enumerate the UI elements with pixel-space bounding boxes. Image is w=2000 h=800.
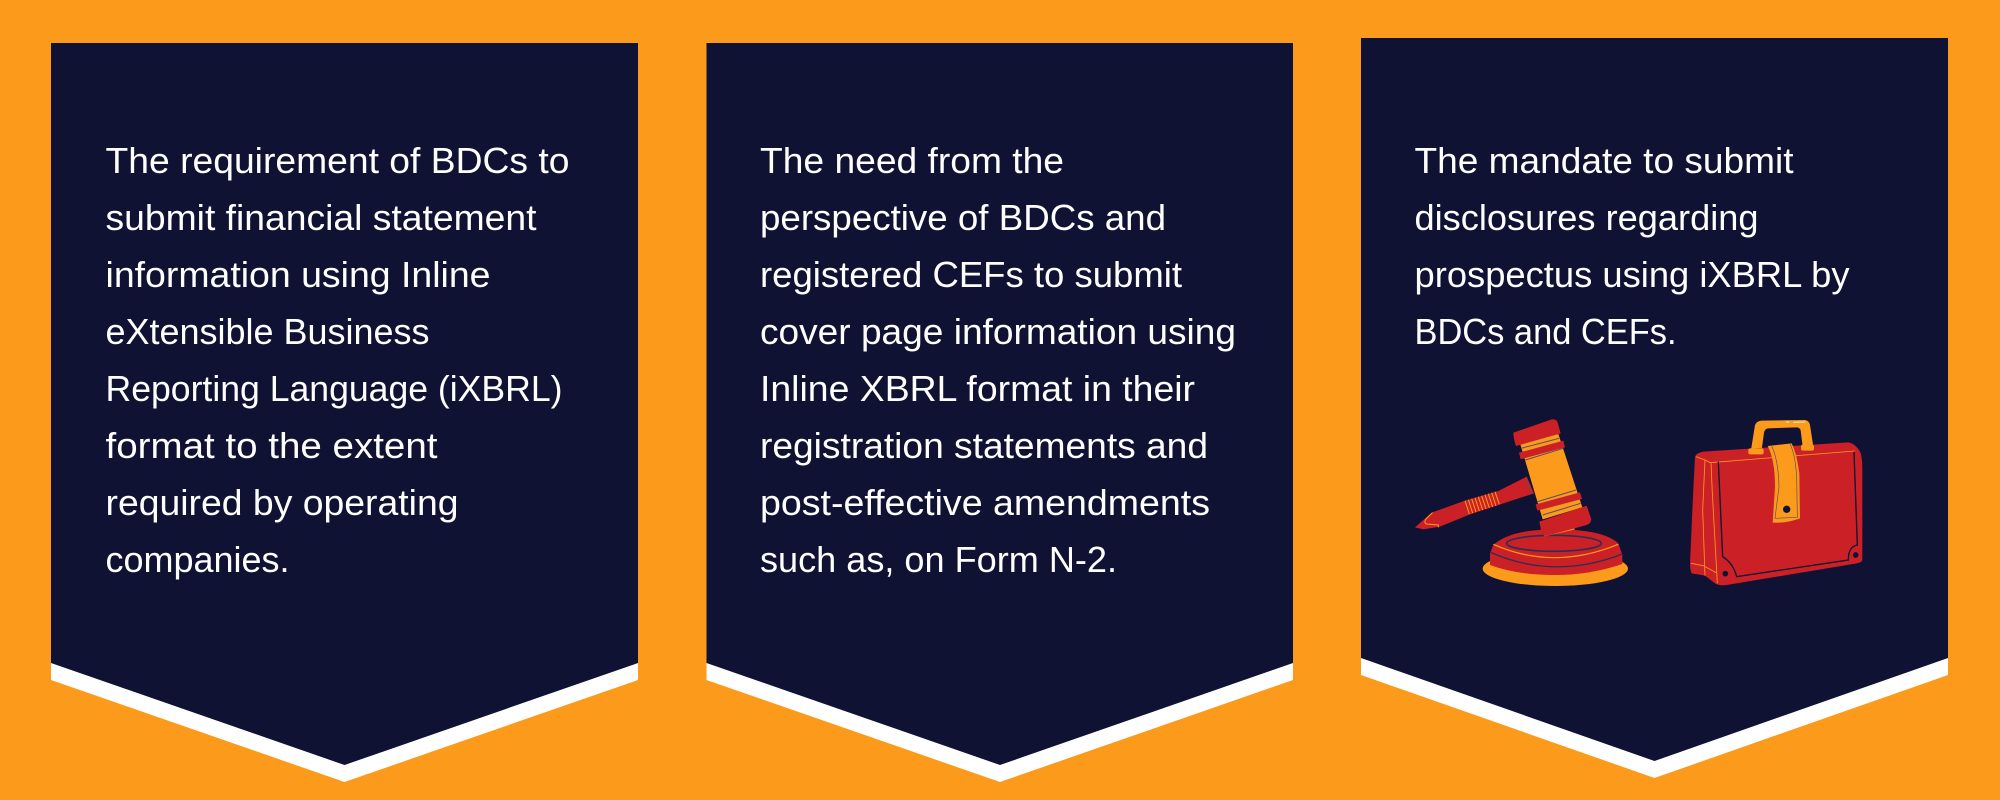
panel: cover page information	[706, 43, 1293, 782]
text block: panel 1: Reporting Language (iXBRL)	[106, 368, 562, 409]
text block: panel 2: registered CEFs to submit	[760, 254, 1182, 295]
panel: prospectus disclosures	[1361, 38, 1948, 778]
text block: panel 3	[1414, 140, 1850, 352]
panel: financial statement requirement	[51, 43, 638, 782]
banner body	[706, 43, 1293, 765]
text block: panel 2: perspective of BDCs and	[760, 197, 1166, 238]
text block: panel 1: required by operating	[106, 482, 458, 523]
text block: panel 3: The mandate to submit	[1414, 140, 1794, 181]
text block: panel 2: registration statements and	[760, 425, 1208, 466]
banner shadow	[1361, 658, 1948, 778]
text block: panel 1: format to the extent	[106, 425, 438, 466]
banner body	[51, 43, 638, 765]
text block: panel 1	[106, 140, 570, 580]
text block: panel 1: The requirement of BDCs to	[106, 140, 570, 181]
text block: panel 2	[760, 140, 1236, 580]
text block: panel 1: information using Inline	[106, 254, 490, 295]
text block: panel 1: companies.	[106, 539, 290, 580]
text block: panel 2: Inline XBRL format in their	[760, 368, 1195, 409]
banner body	[1361, 38, 1948, 761]
text block: panel 3: prospectus using iXBRL by	[1414, 254, 1850, 295]
banner shadow	[706, 663, 1293, 782]
text block: panel 1: eXtensible Business	[106, 311, 430, 352]
text block: panel 2: cover page information using	[760, 311, 1236, 352]
text block: panel 2: such as, on Form N-2.	[760, 539, 1117, 580]
text block: panel 3: BDCs and CEFs.	[1414, 311, 1676, 352]
text block: panel 2: post-effective amendments	[760, 482, 1210, 523]
banner shadow	[51, 663, 638, 782]
text block: panel 1: submit financial statement	[106, 197, 536, 238]
icon: briefcase	[1690, 420, 1862, 585]
icon: gavel	[1415, 419, 1628, 586]
text block: panel 2: The need from the	[760, 140, 1064, 181]
text block: panel 3: disclosures regarding	[1414, 197, 1758, 238]
